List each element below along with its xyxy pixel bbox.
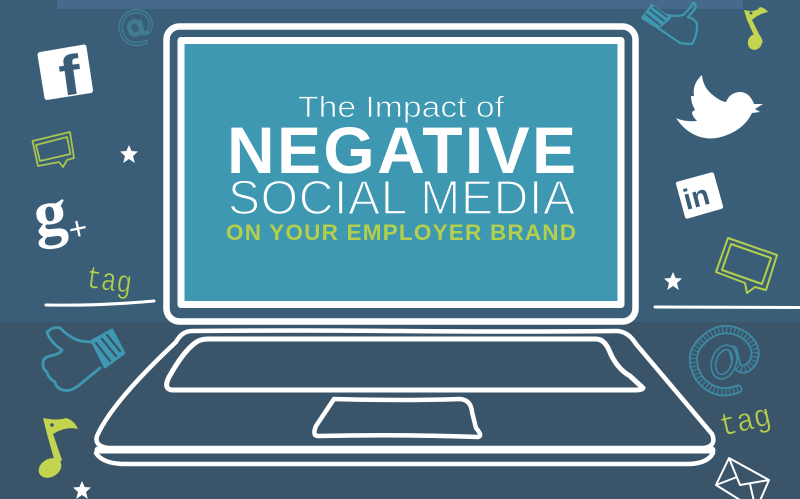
- base bottom lip: [96, 453, 713, 464]
- keyboard area: [167, 339, 643, 390]
- icon: linkedin: in: [680, 179, 713, 217]
- hinge edge: [98, 446, 712, 454]
- divider line left: [46, 301, 154, 305]
- divider line right: [655, 306, 800, 309]
- title line: SOCIAL MEDIA: SOCIAL MEDIA: [228, 172, 575, 225]
- icon: star left: [120, 145, 138, 163]
- icon: music note bottom left: [35, 418, 78, 482]
- laptop screen lid: [166, 26, 636, 322]
- icon: envelope: [716, 458, 769, 499]
- screen panel: [181, 40, 621, 304]
- title line: NEGATIVE: NEGATIVE: [227, 113, 576, 187]
- icon: faded at sign top left: [121, 11, 151, 44]
- icon: star right: [664, 272, 682, 290]
- icon: speech bubble left: [32, 132, 74, 167]
- laptop illustration: [96, 26, 713, 464]
- title text: [226, 91, 576, 245]
- icon: at sign right: [693, 330, 755, 392]
- trackpad: [314, 399, 480, 437]
- title line: The Impact of: The Impact of: [298, 91, 505, 124]
- icon: music note top right: [744, 7, 768, 52]
- laptop base: [96, 330, 713, 448]
- icon: speech bubble right: [716, 238, 777, 293]
- icon: google plus: g: [30, 175, 70, 251]
- icon: twitter bird: [676, 75, 763, 138]
- subtitle line: ON YOUR EMPLOYER BRAND: [226, 220, 576, 245]
- tag label right: tag: [716, 398, 775, 446]
- icon: linkedin: [676, 172, 723, 219]
- icon: google plus: [30, 175, 91, 251]
- icon: facebook: [38, 42, 93, 108]
- icon: thumbs up top right: [642, 3, 697, 44]
- tag label left: tag: [84, 260, 134, 303]
- icon: facebook: f: [55, 42, 86, 108]
- icon: thumbs up bottom left: [43, 328, 124, 390]
- icon: google plus: +: [65, 209, 91, 248]
- icon: star bottom left: [73, 481, 91, 499]
